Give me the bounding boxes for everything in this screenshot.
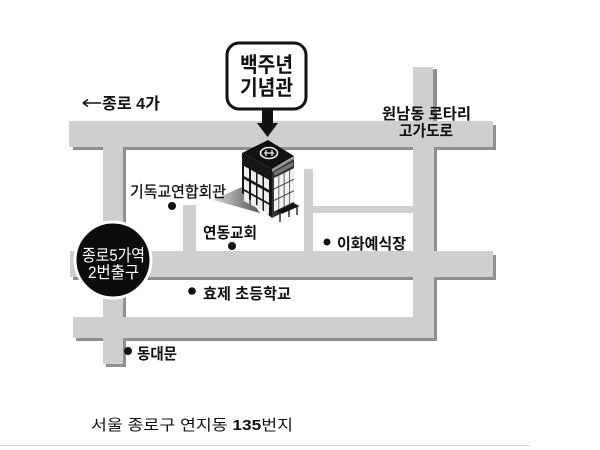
badge: Jongno 5-ga station exit 2: 2번출구 (88, 263, 139, 282)
callout: Centennial Memorial Hall: 기념관 (240, 77, 293, 100)
label: Yeondong Church: 연동교회 (203, 224, 257, 242)
address: 서울 종로구 연지동 135 번지 (91, 417, 293, 434)
label: Dongdaemun (124, 345, 177, 363)
label: Hyoje Elementary School: 효제 초등학교 (203, 285, 291, 303)
label: Wonnam-dong rotary overpass: 원남동 로타리 (382, 105, 471, 123)
direction label: Jongno 4-ga: 종로 4가 (102, 95, 160, 113)
arrow: callout to building (257, 109, 278, 137)
label: Yeondong Church (203, 224, 257, 250)
icon: building (213, 140, 298, 222)
label: Dongdaemun: 동대문 (137, 345, 177, 363)
label: Wonnam-dong rotary overpass (382, 105, 471, 140)
callout: Centennial Memorial Hall: 백주년 (240, 54, 293, 77)
road network (69, 67, 496, 367)
label: Korean Christian Federation Hall: 기독교연합회관 (130, 183, 226, 201)
badge: Jongno 5-ga station exit 2: 종로5가역 (82, 246, 145, 265)
badge: Jongno 5-ga station exit 2 (75, 222, 151, 298)
label: Ewha Wedding Hall: 이화예식장 (337, 235, 406, 253)
label: Wonnam-dong rotary overpass: 고가도로 (399, 122, 453, 140)
callout: Centennial Memorial Hall (227, 43, 306, 109)
label: Korean Christian Federation Hall (130, 183, 226, 210)
